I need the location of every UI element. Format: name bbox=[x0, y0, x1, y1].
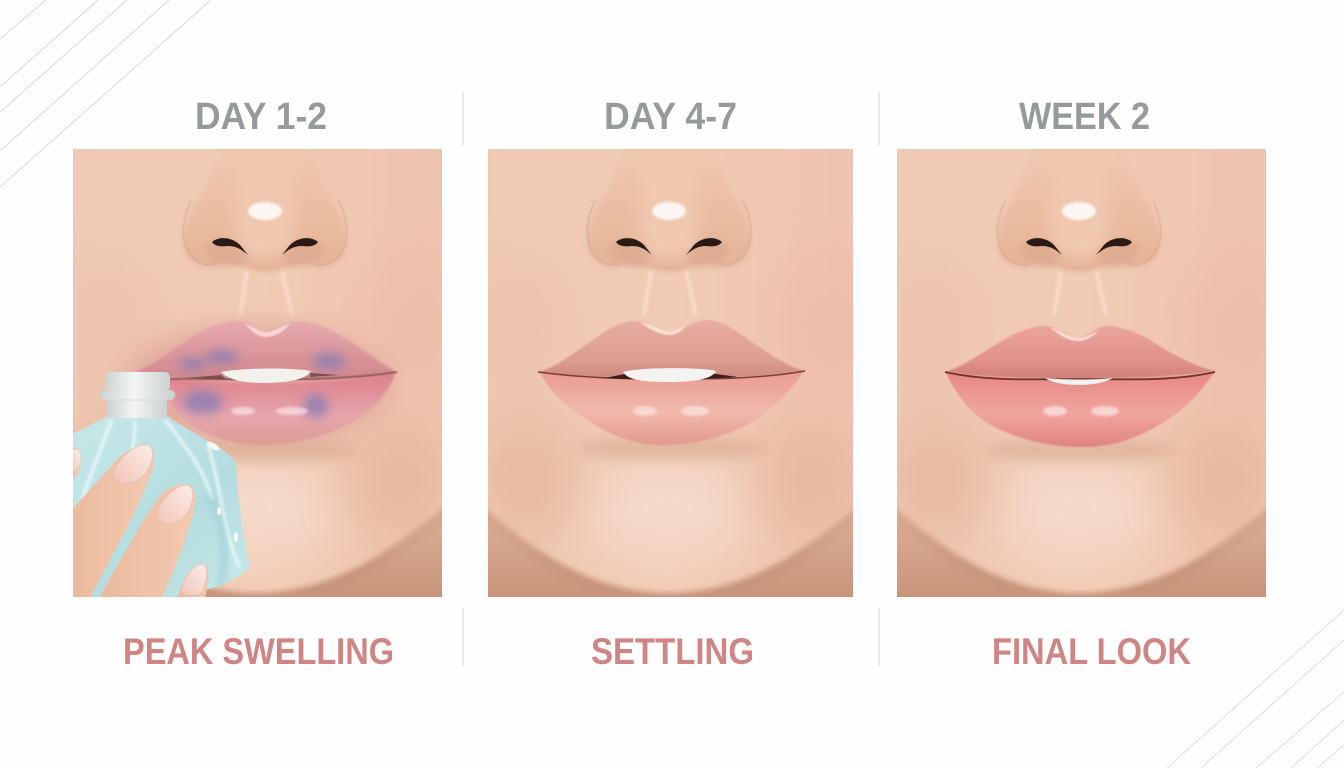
panel: week 2 final look bbox=[897, 149, 1266, 597]
mouth line bbox=[945, 372, 1215, 379]
label: Peak Swelling: PEAK SWELLING bbox=[123, 631, 394, 672]
panel: day 1-2 peak swelling bbox=[73, 149, 442, 597]
skin bbox=[73, 149, 442, 597]
final lips bbox=[945, 326, 1215, 462]
column dividers bbox=[463, 92, 879, 666]
fingers bbox=[70, 446, 154, 598]
cap bbox=[107, 398, 167, 418]
nails bbox=[114, 445, 153, 483]
lip highlights bbox=[1043, 406, 1067, 416]
teeth bbox=[623, 368, 716, 382]
icon: nose bbox=[182, 172, 348, 315]
icon: nose bbox=[586, 172, 752, 315]
settling lips bbox=[538, 320, 805, 460]
bruises bbox=[179, 350, 345, 418]
panel: day 4-7 settling bbox=[488, 149, 853, 597]
lip highlights bbox=[633, 406, 657, 416]
skin bbox=[897, 149, 1266, 597]
teeth bbox=[1045, 378, 1113, 385]
mouth line bbox=[170, 372, 397, 380]
icon: ice pack held by fingers bbox=[70, 372, 250, 598]
corner lines: bottom right bbox=[1167, 610, 1344, 768]
heading: Day 1-2: DAY 1-2 bbox=[195, 96, 327, 138]
skin bbox=[488, 149, 853, 597]
swollen bruised lips bbox=[120, 321, 397, 462]
heading: Week 2: WEEK 2 bbox=[1019, 96, 1150, 138]
lip highlights bbox=[231, 407, 255, 415]
label: Final Look: FINAL LOOK bbox=[992, 631, 1191, 672]
mouth line bbox=[538, 371, 805, 379]
label: Settling: SETTLING bbox=[591, 631, 754, 672]
heading: Day 4-7: DAY 4-7 bbox=[604, 96, 737, 138]
teeth bbox=[221, 368, 311, 383]
corner lines: top left bbox=[0, 0, 211, 187]
icon: nose bbox=[996, 172, 1162, 315]
